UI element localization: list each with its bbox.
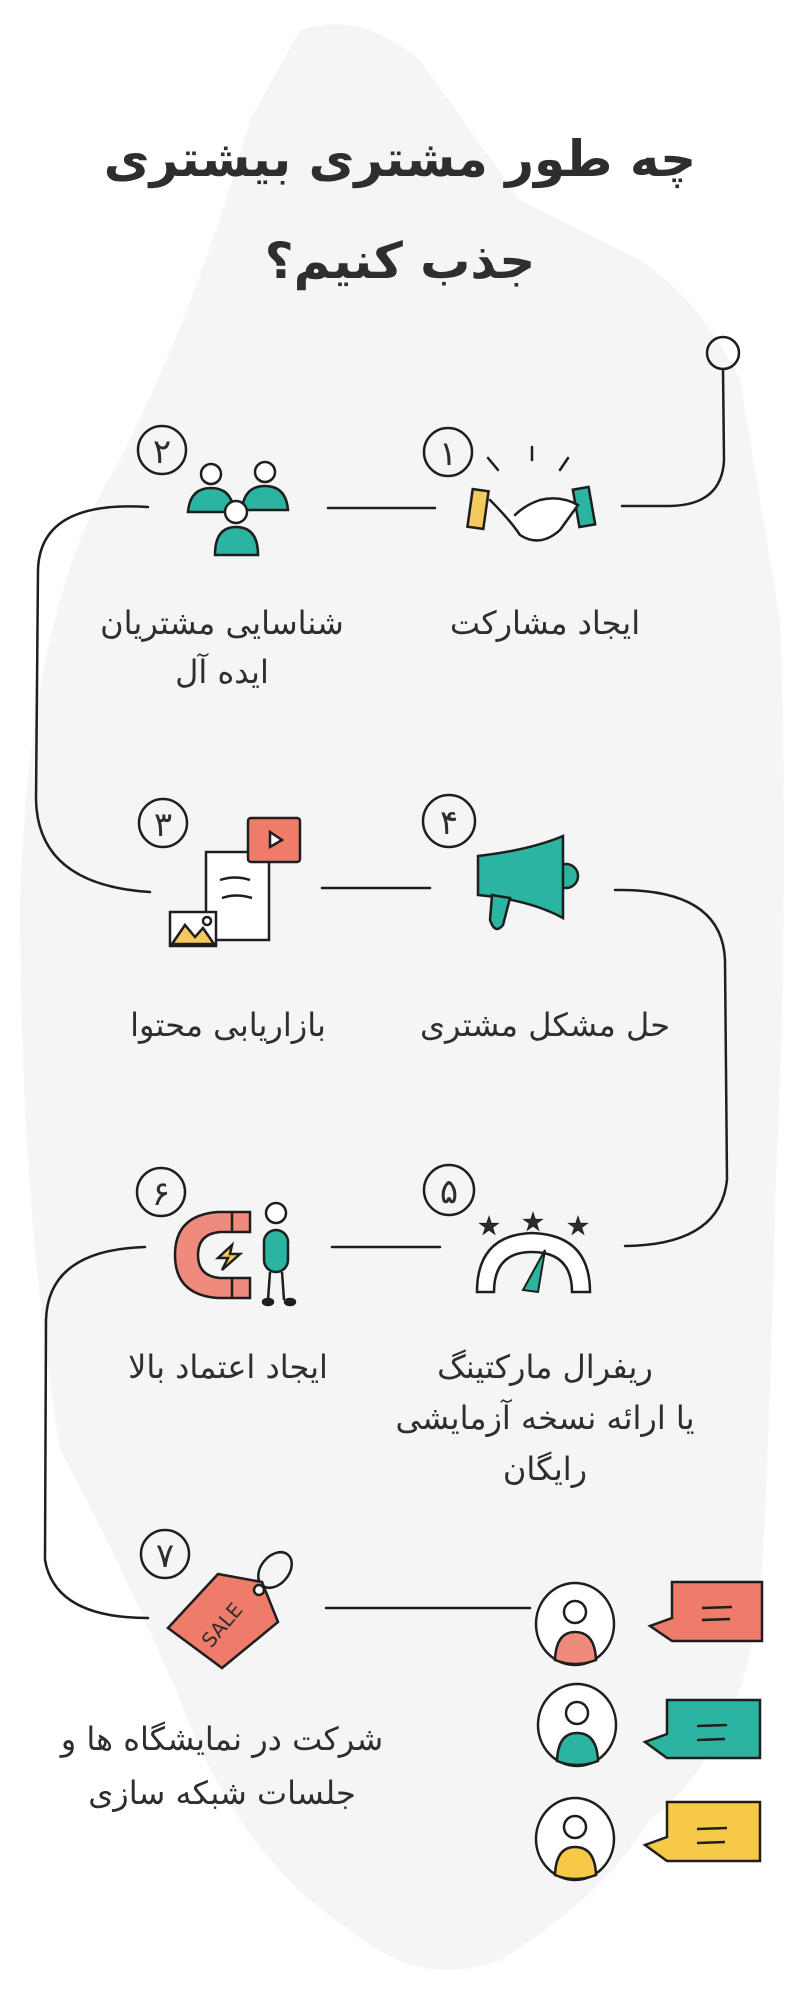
step 5: gauge: [424, 1165, 590, 1292]
label 5: رایگان: [503, 1450, 587, 1488]
icon: sale tag: SALE: [197, 1598, 247, 1652]
icon: megaphone: [478, 836, 578, 929]
label 7: [59, 1720, 383, 1812]
title: چه طور مشتری بیشتری: [104, 130, 696, 189]
step 6: magnet: [137, 1168, 295, 1305]
icon: content: [170, 818, 300, 946]
label 6: ایجاد اعتماد بالا: [128, 1348, 328, 1386]
label 3: بازاریابی محتوا: [130, 1006, 326, 1044]
avatar 2: [538, 1684, 760, 1766]
title: [104, 130, 696, 290]
icon: magnet and person: [175, 1203, 295, 1305]
number 7: ٧: [156, 1536, 174, 1576]
label 5: ریفرال مارکتینگ: [437, 1348, 653, 1386]
icon: gauge with stars: [477, 1208, 590, 1292]
label 7: جلسات شبکه سازی: [88, 1774, 356, 1812]
step 1: handshake: [424, 428, 595, 540]
step 4: megaphone: [423, 795, 578, 929]
number 7: [141, 1530, 189, 1578]
icon: people: [188, 462, 288, 555]
label 4: حل مشکل مشتری: [420, 1006, 670, 1044]
step 7: sale tag: [141, 1530, 299, 1668]
label 2: [100, 604, 344, 691]
step 3: content marketing: [139, 799, 300, 946]
label 1: ایجاد مشارکت: [450, 604, 640, 642]
number 2: [138, 426, 186, 474]
number 5: ۵: [440, 1172, 458, 1212]
icon: sale tag: [168, 1546, 299, 1668]
icon: gauge with stars: ★: [522, 1208, 544, 1236]
avatars with speech bubbles: [536, 1582, 762, 1880]
number 4: ۴: [440, 803, 458, 843]
number 6: ۶: [152, 1174, 170, 1214]
number 6: [137, 1168, 185, 1216]
number 3: ٣: [154, 805, 172, 845]
label 7: شرکت در نمایشگاه ها و: [59, 1720, 383, 1758]
number 2: ٢: [153, 432, 171, 472]
icon: gauge with stars: ★: [478, 1212, 500, 1240]
step 2: people: [138, 426, 288, 555]
number 5: [424, 1165, 474, 1215]
label 2: ایده آل: [175, 652, 269, 691]
path connector: [36, 337, 739, 1618]
label 2: شناسایی مشتریان: [100, 604, 344, 642]
title: جذب کنیم؟: [265, 232, 535, 290]
avatar 1: [536, 1582, 762, 1665]
number 1: [424, 428, 472, 476]
number 1: ١: [439, 434, 457, 474]
label 5: یا ارائه نسخه آزمایشی: [395, 1398, 695, 1437]
label 5: [395, 1348, 695, 1488]
number 4: [423, 795, 475, 847]
number 3: [139, 799, 187, 847]
icon: gauge with stars: ★: [567, 1212, 589, 1240]
avatar 3: [536, 1798, 760, 1880]
icon: handshake: [467, 447, 595, 540]
